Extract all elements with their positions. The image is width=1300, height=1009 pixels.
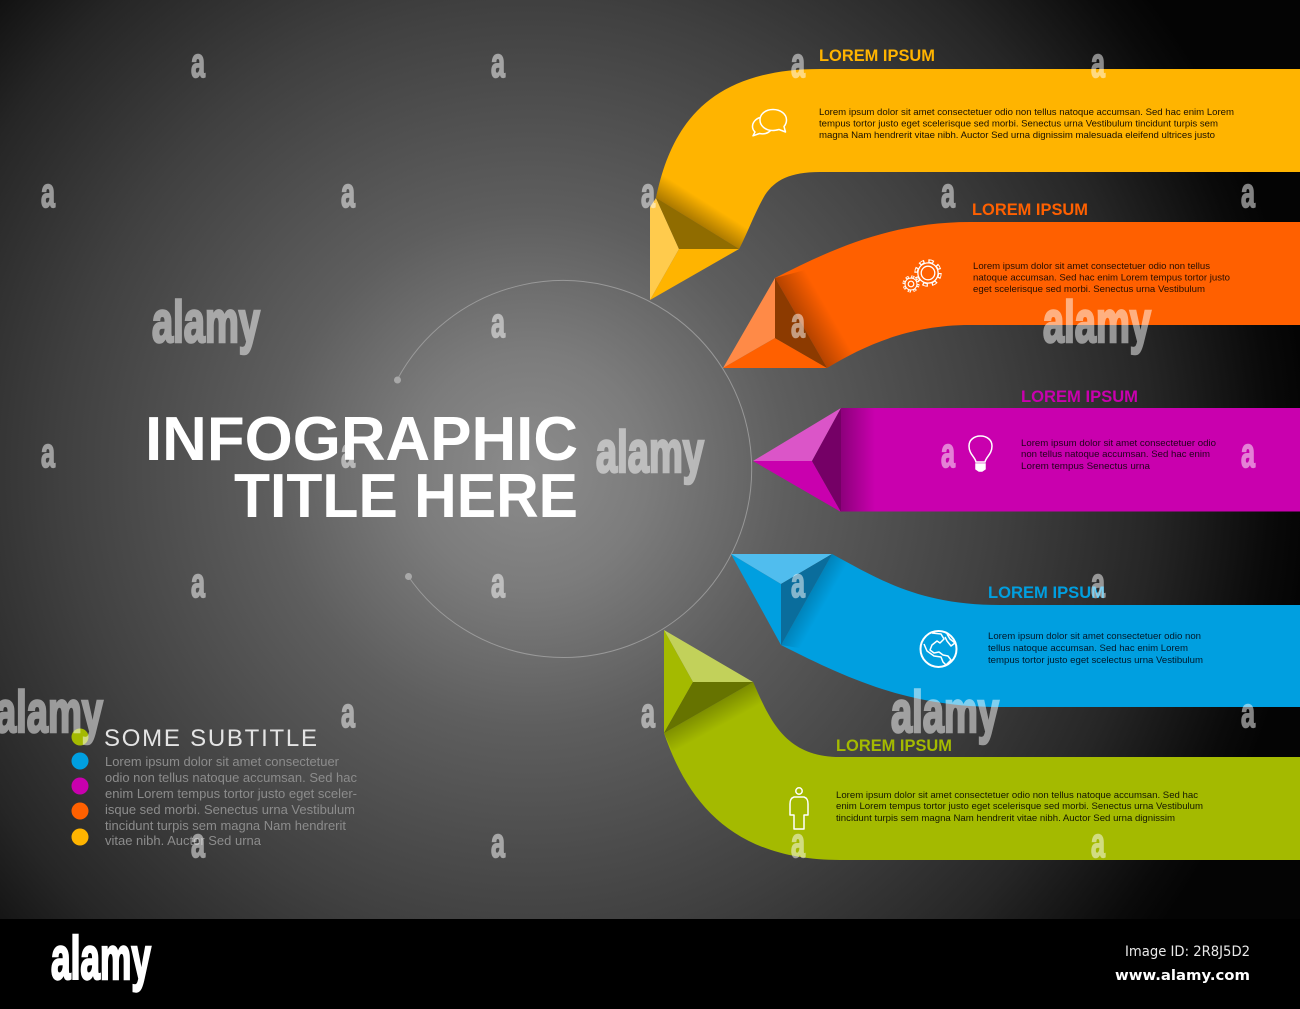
- watermark: small letters: a: [41, 429, 55, 476]
- legend text block: enim Lorem tempus tortor justo eget sceler-: [105, 786, 357, 801]
- watermark: small letters: a: [1091, 39, 1105, 86]
- watermark: large logos: alamy: [891, 680, 999, 745]
- title: [145, 405, 578, 531]
- legend text block: tincidunt turpis sem magna Nam hendrerit: [105, 818, 346, 833]
- footer image id: Image ID: 2R8J5D2: [1125, 944, 1250, 960]
- panel: orange ribbon: natoque accumsan. Sed hac enim Lorem tempus tortor justo: [973, 272, 1230, 282]
- panel: magenta ribbon: Lorem ipsum dolor sit amet consectetuer odio: [1021, 437, 1216, 448]
- watermark: small letters: a: [341, 429, 355, 476]
- footer logo: alamy: [51, 925, 151, 992]
- central circle outline: [394, 280, 752, 657]
- watermark: small letters: a: [191, 39, 205, 86]
- watermark: small letters: a: [41, 169, 55, 216]
- watermark: small letters: a: [791, 559, 805, 606]
- panel: orange ribbon: Lorem ipsum dolor sit amet consectetuer odio non tellus: [973, 260, 1210, 271]
- watermark: small letters: a: [1241, 429, 1255, 476]
- watermark: small letters: a: [791, 299, 805, 346]
- legend text block: [105, 754, 357, 848]
- watermark: small letters: a: [641, 169, 655, 216]
- watermark: small letters: a: [491, 299, 505, 346]
- watermark: small letters: a: [941, 169, 955, 216]
- footer image id: [1115, 944, 1250, 984]
- footer image id: www.alamy.com: [1115, 968, 1250, 984]
- watermark: small letters: a: [341, 169, 355, 216]
- watermark: small letters: a: [1241, 169, 1255, 216]
- watermark: large logos: alamy: [596, 420, 704, 485]
- watermark: large logos: [0, 290, 1151, 745]
- icon: globe: [920, 631, 956, 667]
- panel: yellow ribbon: [640, 47, 1300, 300]
- watermark: small letters: a: [791, 39, 805, 86]
- footer bar: [0, 919, 1300, 1009]
- icon: chat bubbles: [752, 110, 786, 136]
- title: TITLE HERE: [234, 462, 578, 531]
- panel: magenta ribbon: Lorem tempus Senectus urna: [1021, 460, 1151, 471]
- legend text block: Lorem ipsum dolor sit amet consectetuer: [105, 754, 340, 769]
- watermark: small letters: a: [941, 429, 955, 476]
- icon: light bulb: [969, 436, 992, 471]
- panel: yellow ribbon: Lorem ipsum dolor sit amet consectetuer odio non tellus natoque accumsan. Sed hac enim Lorem: [819, 106, 1234, 117]
- watermark: small letters: a: [1241, 689, 1255, 736]
- watermark: small letters: a: [641, 689, 655, 736]
- icon: person: [790, 788, 808, 829]
- watermark: large logos: alamy: [1043, 290, 1151, 355]
- watermark: small letters: a: [191, 559, 205, 606]
- panel: orange ribbon: eget scelerisque sed morbi. Senectus urna Vestibulum: [973, 283, 1205, 294]
- panel: blue ribbon: tellus natoque accumsan. Sed hac enim Lorem: [988, 642, 1188, 653]
- watermark: small letters: a: [341, 689, 355, 736]
- panel: green ribbon: LOREM IPSUM: [836, 737, 952, 755]
- panel: orange ribbon: [723, 201, 1300, 368]
- watermark: small letters: a: [1091, 559, 1105, 606]
- panel: blue ribbon: Lorem ipsum dolor sit amet consectetuer odio non: [988, 630, 1201, 641]
- watermark: small letters: a: [491, 39, 505, 86]
- watermark: small letters: a: [491, 819, 505, 866]
- watermark: small letters: a: [791, 819, 805, 866]
- panel: blue ribbon: [731, 554, 1300, 707]
- panel: yellow ribbon: tempus tortor justo eget scelerisque sed morbi. Senectus urna Vestibulum tincidunt turpis sem: [819, 118, 1218, 128]
- watermark: large logos: alamy: [152, 290, 260, 355]
- panel: green ribbon: enim Lorem tempus tortor justo eget scelerisque sed morbi. Senectus urna Vestibulum: [836, 800, 1203, 811]
- panel: green ribbon: [664, 630, 1300, 860]
- legend: color dots: [72, 728, 88, 846]
- panel: magenta ribbon: LOREM IPSUM: [1021, 388, 1138, 406]
- panel: yellow ribbon: LOREM IPSUM: [819, 47, 935, 65]
- panel: green ribbon: tincidunt turpis sem magna Nam hendrerit vitae nibh. Auctor Sed urna dignissim: [836, 812, 1175, 823]
- legend text block: odio non tellus natoque accumsan. Sed hac: [105, 770, 357, 785]
- title: INFOGRAPHIC: [145, 405, 578, 474]
- panel: green ribbon: Lorem ipsum dolor sit amet consectetuer odio non tellus natoque accumsan. Sed hac: [836, 789, 1198, 800]
- panel: magenta ribbon: non tellus natoque accumsan. Sed hac enim: [1021, 448, 1210, 459]
- legend text block: vitae nibh. Auctor Sed urna: [105, 833, 262, 848]
- watermark: small letters: [41, 39, 1255, 866]
- watermark: small letters: a: [1091, 819, 1105, 866]
- panel: blue ribbon: LOREM IPSUM: [988, 584, 1105, 602]
- watermark: small letters: a: [491, 559, 505, 606]
- panel: yellow ribbon: magna Nam hendrerit vitae nibh. Auctor Sed urna dignissim malesuada eleifend ultrices justo: [819, 129, 1215, 140]
- panel: blue ribbon: tempus tortor justo eget scelectus urna Vestibulum: [988, 654, 1203, 665]
- watermark: small letters: a: [191, 819, 205, 866]
- panel: orange ribbon: LOREM IPSUM: [972, 201, 1088, 219]
- legend text block: isque sed morbi. Senectus urna Vestibulum: [105, 802, 355, 817]
- panel: magenta ribbon: [753, 388, 1300, 512]
- subtitle: SOME SUBTITLE: [104, 725, 317, 752]
- icon: gears: [904, 261, 940, 291]
